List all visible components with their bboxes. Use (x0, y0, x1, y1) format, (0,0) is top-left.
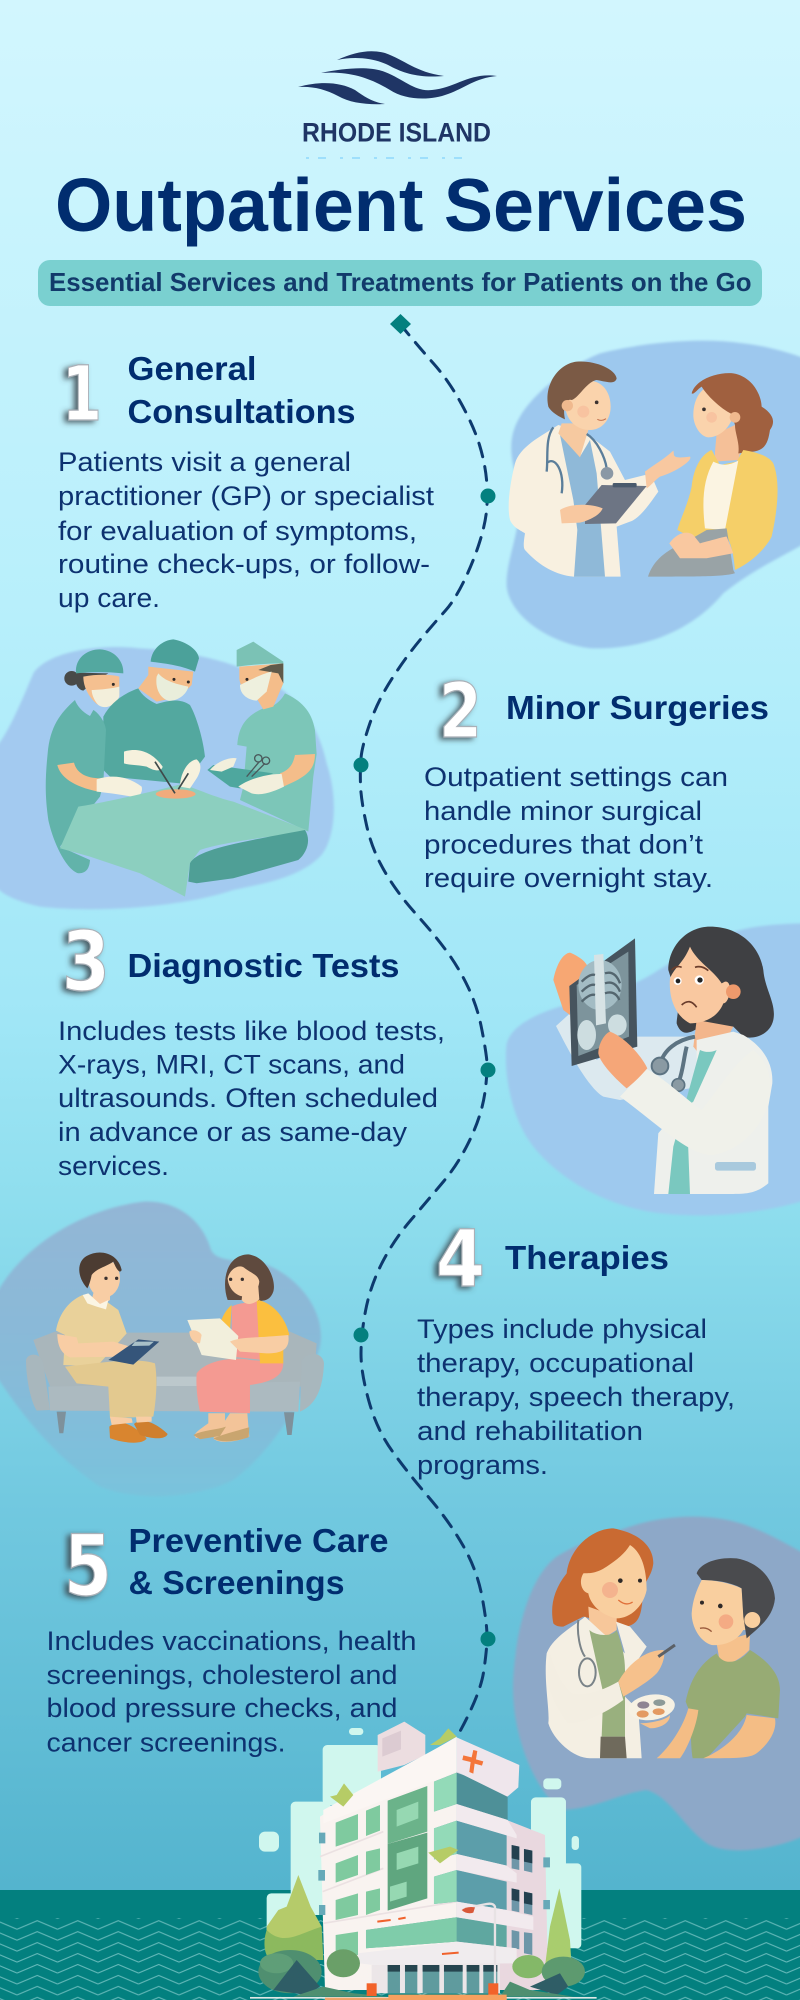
number 2: 2 (439, 666, 482, 755)
heading: General Consultations (128, 350, 356, 430)
panel: General Consultations (58, 349, 435, 613)
number 3: 3 (62, 915, 110, 1010)
text: Minor Surgeries description: require overnight stay. (424, 863, 713, 893)
heading: General Consultations: General (128, 350, 256, 387)
text: General Consultations description (58, 447, 435, 613)
number 5: 5 (64, 1517, 112, 1615)
text: Diagnostic Tests description: Includes tests like blood tests, (58, 1016, 445, 1046)
illustration: surgical team operating (0, 639, 334, 909)
illustration: therapy couple on sofa (0, 1202, 324, 1496)
logo: Rhode Island: RHODE ISLAND (302, 118, 491, 148)
text: General Consultations description: practitioner (GP) or specialist (58, 481, 435, 511)
heading: Therapies: Therapies (505, 1239, 669, 1276)
illustration: doctor and patient consultation (507, 341, 800, 648)
illustration: hospital building (250, 1722, 597, 2000)
number 4: 4 (436, 1215, 485, 1305)
text: Preventive Care description: blood pressure checks, and (46, 1693, 398, 1723)
text: Diagnostic Tests description: X-rays, MRI, CT scans, and (58, 1050, 405, 1080)
text: Therapies description: Types include physical (417, 1314, 707, 1344)
footer band with chevrons (0, 1890, 800, 2000)
text: Preventive Care description (46, 1626, 416, 1758)
text: General Consultations description: Patients visit a general (58, 447, 351, 477)
heading: Diagnostic Tests: Diagnostic Tests (128, 947, 400, 984)
text: Minor Surgeries description: Outpatient settings can (424, 762, 728, 792)
text: General Consultations description: up care. (58, 583, 160, 613)
title: Outpatient Services (55, 163, 747, 247)
illustration: doctor examining X-ray (506, 923, 800, 1215)
text: Diagnostic Tests description (58, 1016, 445, 1181)
text: Preventive Care description: cancer screenings. (46, 1728, 286, 1758)
panel: Therapies (417, 1215, 735, 1480)
text: General Consultations description: routine check-ups, or follow- (58, 549, 430, 579)
text: Preventive Care description: screenings, cholesterol and (46, 1660, 398, 1690)
text: Therapies description: therapy, occupational (417, 1348, 694, 1378)
text: Therapies description (417, 1314, 735, 1480)
heading: Preventive Care & Screenings: & Screenings (128, 1564, 344, 1601)
text: General Consultations description: for evaluation of symptoms, (58, 516, 417, 546)
text: Diagnostic Tests description: in advance or as same-day (58, 1117, 408, 1147)
panel: Preventive Care & Screenings (46, 1517, 416, 1758)
heading: General Consultations: Consultations (128, 393, 356, 430)
heading: Preventive Care & Screenings: Preventive Care (128, 1522, 388, 1559)
subtitle banner (38, 260, 762, 306)
text: Minor Surgeries description: handle minor surgical (424, 796, 702, 826)
panel: Diagnostic Tests (58, 915, 445, 1181)
text: Therapies description: and rehabilitation (417, 1416, 643, 1446)
text: Preventive Care description: Includes vaccinations, health (46, 1626, 416, 1656)
illustration: doctor treating a boy (513, 1517, 800, 1850)
subtitle banner: Essential Services and Treatments for Patients on the Go (49, 267, 752, 297)
logo: Rhode Island (298, 51, 497, 158)
number 1: 1 (62, 349, 102, 438)
text: Minor Surgeries description: procedures that don’t (424, 830, 704, 860)
heading: Minor Surgeries: Minor Surgeries (506, 689, 769, 726)
text: Therapies description: programs. (417, 1450, 548, 1480)
text: Therapies description: therapy, speech therapy, (417, 1382, 735, 1412)
panel: Minor Surgeries (424, 666, 769, 893)
text: Diagnostic Tests description: services. (58, 1151, 169, 1181)
text: Diagnostic Tests description: ultrasounds. Often scheduled (58, 1083, 438, 1113)
heading: Preventive Care & Screenings (128, 1522, 388, 1601)
text: Minor Surgeries description (424, 762, 728, 893)
dashed journey path (354, 314, 496, 1735)
